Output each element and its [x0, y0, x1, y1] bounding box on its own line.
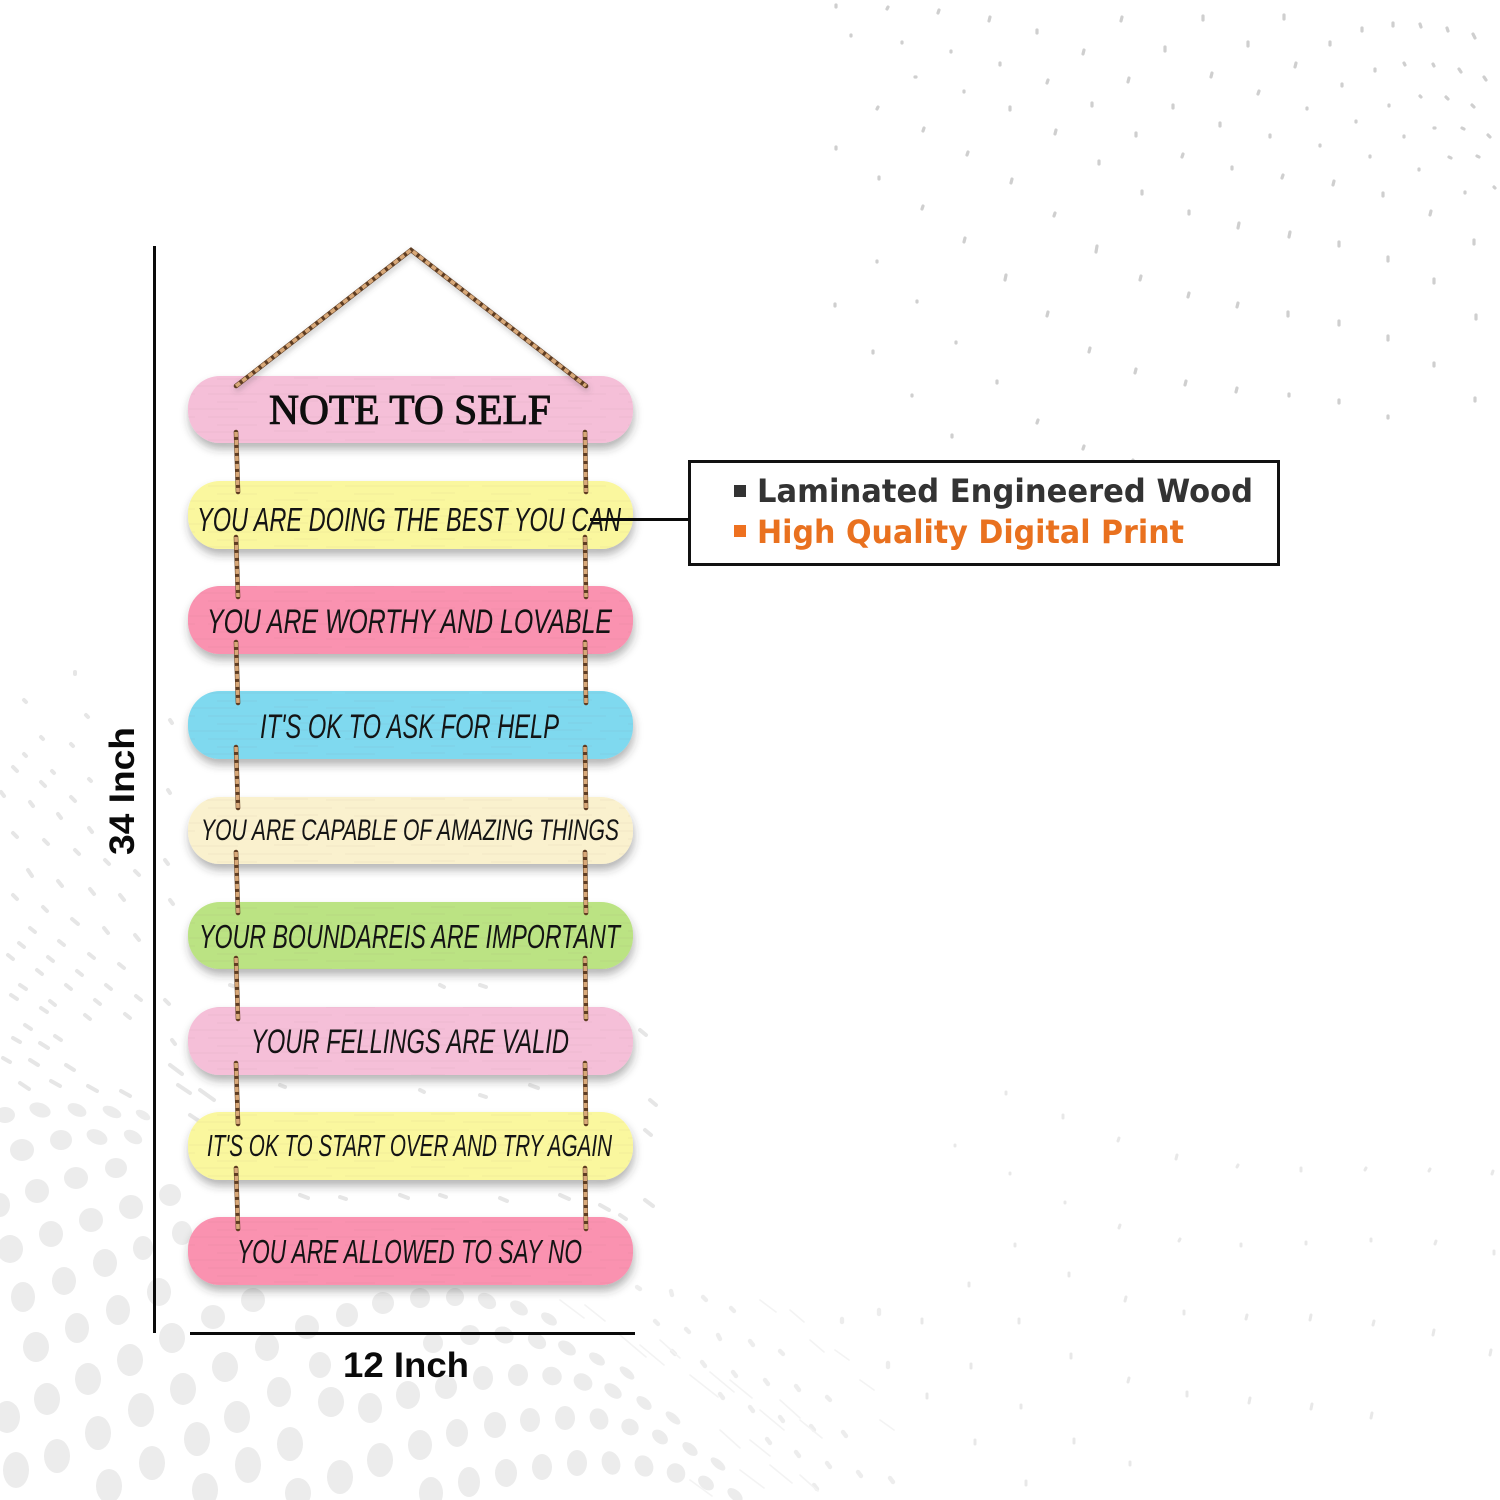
height label: 34 Inch	[103, 727, 142, 855]
width dimension line	[190, 1332, 635, 1335]
plank: worthy and lovable	[188, 586, 633, 654]
callout: material specs	[690, 462, 1278, 564]
plank: doing the best	[188, 481, 633, 549]
heading: note to self: NOTE TO SELF	[269, 388, 551, 434]
spec: laminated engineered wood: Laminated Engineered Wood	[757, 472, 1253, 510]
connecting ropes between planks	[236, 432, 586, 1229]
plank: note to self	[188, 376, 633, 443]
width label: 12 Inch	[343, 1346, 469, 1385]
text: doing the best: YOU ARE DOING THE BEST YOU CAN	[197, 501, 621, 538]
plank: allowed to say no	[188, 1217, 633, 1285]
bullet: laminated wood	[734, 485, 746, 497]
plank: feelings are valid	[188, 1007, 633, 1075]
hanging rope: top triangle	[236, 250, 586, 386]
text: feelings are valid: YOUR FELLINGS ARE VALID	[251, 1023, 569, 1061]
height dimension line	[153, 246, 156, 1333]
spec: high quality digital print: High Quality Digital Print	[757, 513, 1184, 551]
plank: start over	[188, 1112, 633, 1180]
text: boundaries: YOUR BOUNDAREIS ARE IMPORTANT	[199, 918, 622, 955]
callout connector	[590, 518, 690, 521]
plank: capable of amazing things	[188, 797, 633, 864]
bullet: digital print	[734, 525, 746, 537]
plank: boundaries	[188, 902, 633, 969]
plank: ask for help	[188, 691, 633, 759]
text: allowed to say no: YOU ARE ALLOWED TO SAY NO	[237, 1233, 582, 1270]
text: capable of amazing things: YOU ARE CAPABLE OF AMAZING THINGS	[201, 814, 619, 847]
text: start over: IT'S OK TO START OVER AND TRY AGAIN	[207, 1128, 612, 1163]
text: ask for help: IT'S OK TO ASK FOR HELP	[260, 708, 559, 746]
text: worthy and lovable: YOU ARE WORTHY AND LOVABLE	[207, 603, 612, 641]
